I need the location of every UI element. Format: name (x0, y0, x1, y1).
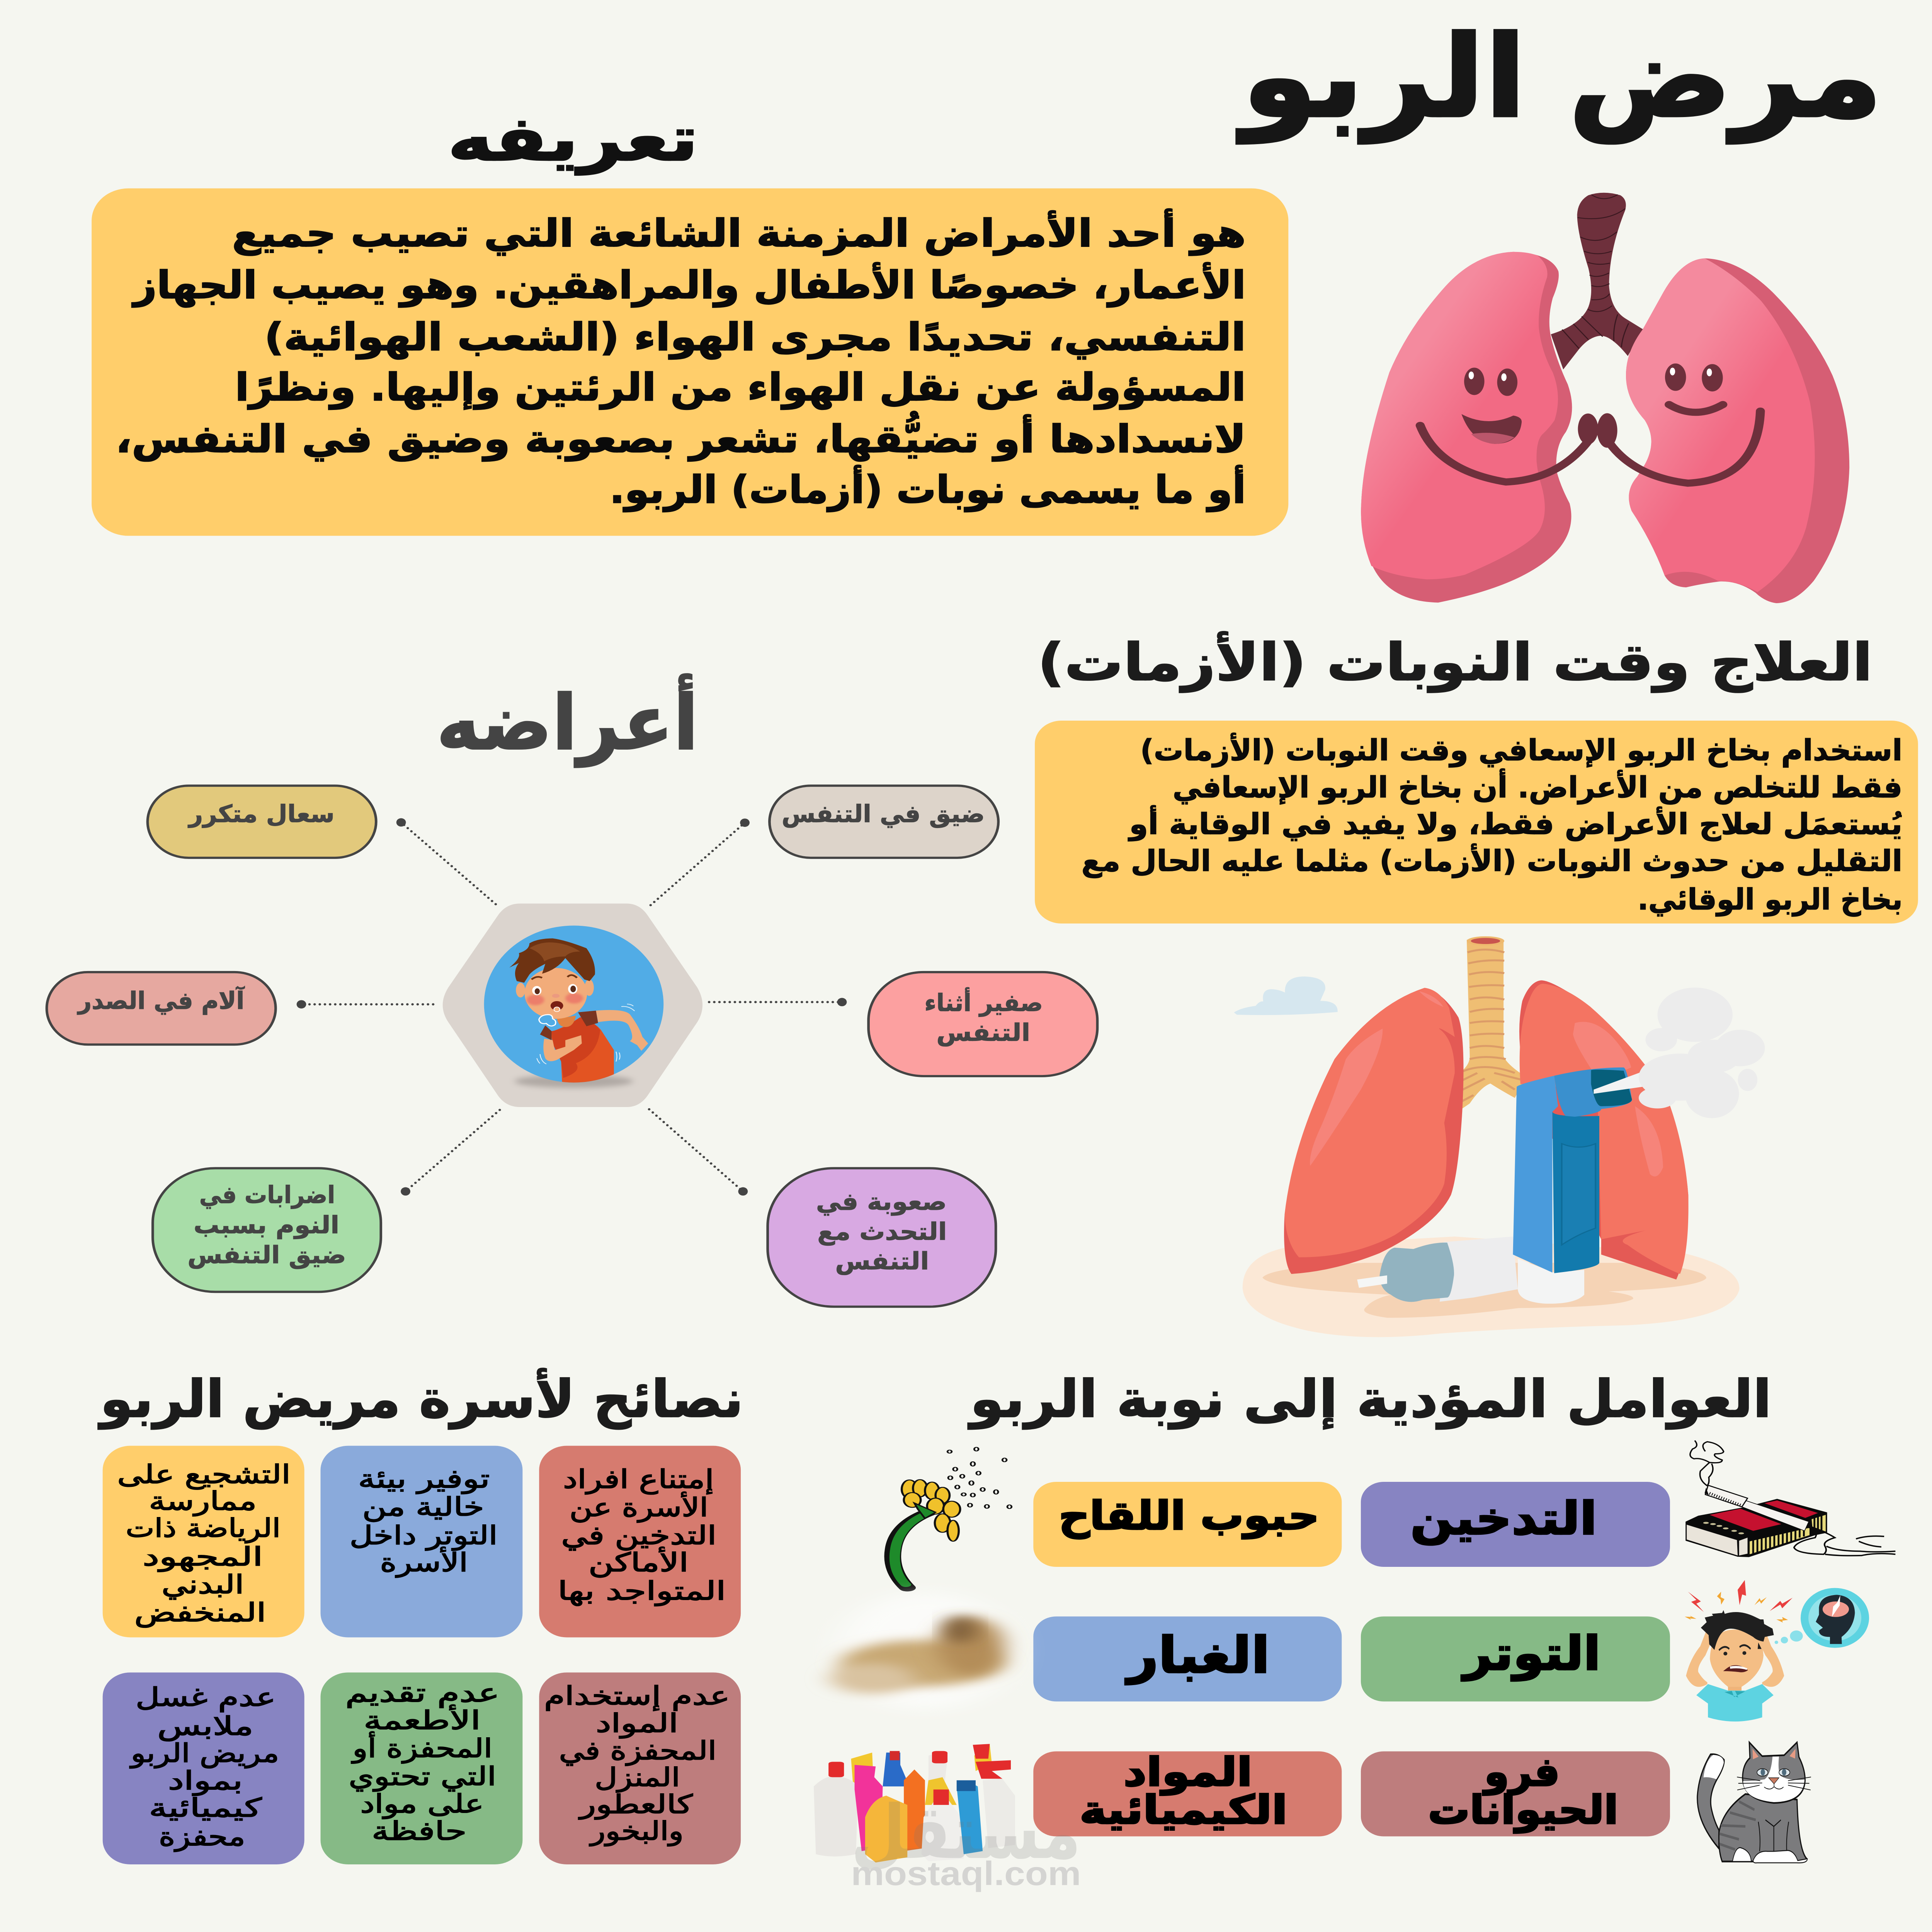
tip: no smoking: إمتناع افراد (563, 1464, 714, 1495)
heading: attack triggers: العوامل المؤدية إلى نوبة الربو (968, 1369, 1772, 1429)
tip: encourage exercise (103, 1446, 304, 1638)
tip: home triggers (539, 1672, 741, 1864)
tip: stress free home: توفير بيئة (358, 1464, 490, 1494)
tip: home triggers: والبخور (589, 1816, 684, 1846)
treatment text (1082, 733, 1903, 917)
card: pollen (1033, 1482, 1342, 1567)
tip: food: على مواد (360, 1789, 484, 1819)
spray cloud (1639, 988, 1765, 1118)
heading: treatment during attacks: العلاج وقت النوبات (الأزمات) (1037, 631, 1872, 693)
trachea (1446, 936, 1524, 1120)
tip: stress free home: خالية من (362, 1492, 484, 1522)
tip: laundry: عدم غسل (136, 1682, 276, 1712)
cloud (1234, 976, 1338, 1015)
tip: laundry: بمواد (168, 1765, 243, 1796)
pill: sleep disturbance: النوم بسبب (194, 1211, 339, 1239)
pill: sleep disturbance (153, 1168, 381, 1292)
heading: definition: تعريفه (448, 104, 698, 175)
inhaler (1513, 1067, 1643, 1304)
card: animal fur: الحيوانات (1428, 1787, 1618, 1833)
pill: difficulty talking: التنفس (835, 1247, 929, 1275)
connectors (297, 818, 847, 1196)
definition text: أو ما يسمى نوبات (أزمات) الربو. (610, 465, 1246, 512)
pill: difficulty talking (768, 1168, 996, 1307)
tip: encourage exercise: البدني (162, 1570, 244, 1600)
tip: home triggers: عدم إستخدام (544, 1681, 730, 1711)
tip: home triggers: المحفزة في (559, 1736, 716, 1766)
tip: encourage exercise: الرياضة ذات (126, 1513, 281, 1543)
illustration: lungs with inhaler (1234, 936, 1765, 1337)
title: مرض الربو (1236, 11, 1883, 144)
tip: encourage exercise: التشجيع على (117, 1459, 291, 1490)
tip: home triggers: كالعطور (578, 1789, 693, 1820)
left lung (1284, 988, 1463, 1274)
right lung (1626, 259, 1849, 603)
icon: boy short of breath (484, 925, 663, 1088)
watermark: mostaql.com (851, 1854, 1081, 1892)
left lung (1361, 252, 1572, 602)
tip: laundry: ملابس (157, 1711, 253, 1741)
definition text: التنفسي، تحديدًا مجرى الهواء (الشعب الهوائية) (264, 315, 1246, 359)
watermark: مستقل (851, 1789, 1081, 1876)
illustration: smiling lungs (1361, 193, 1849, 603)
tip: home triggers: المواد (596, 1708, 678, 1738)
icon: cleaning bottles (814, 1744, 1015, 1862)
definition text (116, 209, 1246, 512)
pill: wheezing: التنفس (936, 1019, 1030, 1046)
faces and arms (1420, 364, 1760, 483)
tip: no smoking: الأماكن (588, 1546, 689, 1578)
right lung (1519, 980, 1689, 1279)
tip: laundry: كيميائية (149, 1793, 262, 1823)
panel: trigger cards (1033, 1482, 1670, 1836)
card: dust (1033, 1616, 1342, 1701)
tip: stress free home (321, 1446, 522, 1638)
heading: family tips: نصائح لأسرة مريض الربو (98, 1368, 743, 1429)
tip: food: التي تحتوي (349, 1762, 496, 1792)
icon: stressed man (1685, 1580, 1869, 1721)
tip: no smoking: التدخين في (561, 1520, 716, 1551)
icon: cigarette on matchbox (1685, 1440, 1895, 1557)
ground (1243, 1236, 1739, 1337)
tip: food (321, 1672, 522, 1864)
card: dust: الغبار (1125, 1626, 1270, 1685)
heading: symptoms: أعراضه (437, 673, 699, 768)
tip: laundry: محفزة (159, 1821, 245, 1852)
trachea (1551, 193, 1643, 369)
card: chemicals: المواد (1124, 1749, 1252, 1795)
card: stress (1361, 1616, 1670, 1701)
pill: chest pain (47, 972, 276, 1044)
tip: encourage exercise: المنخفض (134, 1597, 266, 1628)
pill: wheezing (869, 972, 1097, 1076)
definition text: المسؤولة عن نقل الهواء من الرئتين وإليها. ونظرًا (235, 365, 1246, 410)
definition text: لانسدادها أو تضيُّقها، تشعر بصعوبة وضيق في التنفس، (116, 411, 1246, 461)
card: pollen: حبوب اللقاح (1059, 1493, 1319, 1539)
symptoms diagram (47, 786, 1097, 1307)
watermark (851, 1789, 1081, 1892)
tip: laundry: مريض الربو (129, 1738, 279, 1769)
tip: stress free home: الأسرة (380, 1546, 468, 1578)
pill: shortness of breath (769, 786, 998, 858)
definition text: الأعمار، خصوصًا الأطفال والمراهقين. وهو يصيب الجهاز (131, 262, 1246, 308)
tip: encourage exercise: ممارسة (149, 1486, 257, 1516)
card: animal fur: فرو (1483, 1749, 1560, 1795)
tip: food: المحفزة أو (351, 1731, 492, 1764)
tip: no smoking: المتواجد بها (558, 1576, 726, 1606)
tip: food: الأطعمة (364, 1704, 481, 1735)
pill: sleep disturbance: ضيق التنفس (187, 1241, 346, 1269)
thought bubble (1801, 1588, 1869, 1648)
pill: cough (148, 786, 376, 858)
pill: shortness of breath: ضيق في التنفس (782, 800, 985, 828)
tip: no smoking: الأسرة عن (570, 1492, 708, 1523)
tip: food: حافظة (372, 1816, 467, 1846)
card: smoking: التدخين (1410, 1492, 1597, 1545)
tip: home triggers: المنزل (595, 1762, 680, 1793)
pill: difficulty talking: التحدث مع (817, 1218, 947, 1246)
card: chemicals (1033, 1749, 1342, 1836)
tip: stress free home: التوتر داخل (350, 1520, 498, 1551)
tip: no smoking (539, 1446, 741, 1638)
pill: sleep disturbance: اضرابات في (199, 1181, 335, 1209)
icon: pollen flower (893, 1447, 1012, 1588)
icon: cat (1697, 1742, 1811, 1863)
pill: chest pain: آلام في الصدر (77, 986, 245, 1015)
panel: family tips grid (103, 1446, 741, 1864)
tip: food: عدم تقديم (345, 1678, 500, 1708)
tip: laundry (103, 1672, 304, 1864)
card: animal fur (1361, 1749, 1670, 1836)
pill: wheezing: صفير أثناء (924, 987, 1043, 1017)
card: smoking (1361, 1482, 1670, 1567)
pill: difficulty talking: صعوبة في (816, 1188, 947, 1216)
panel: definition (92, 189, 1288, 536)
pill: cough: سعال متكرر (188, 800, 335, 828)
icon: dust cloud (830, 1592, 1013, 1709)
definition text: هو أحد الأمراض المزمنة الشائعة التي تصيب جميع (232, 209, 1246, 256)
hexagon (443, 903, 702, 1107)
tip: encourage exercise: المجهود (143, 1542, 263, 1572)
spare canister (1357, 1236, 1518, 1302)
panel: treatment (1035, 721, 1918, 923)
card: stress: التوتر (1461, 1626, 1600, 1681)
card: chemicals: الكيميائية (1080, 1787, 1287, 1833)
